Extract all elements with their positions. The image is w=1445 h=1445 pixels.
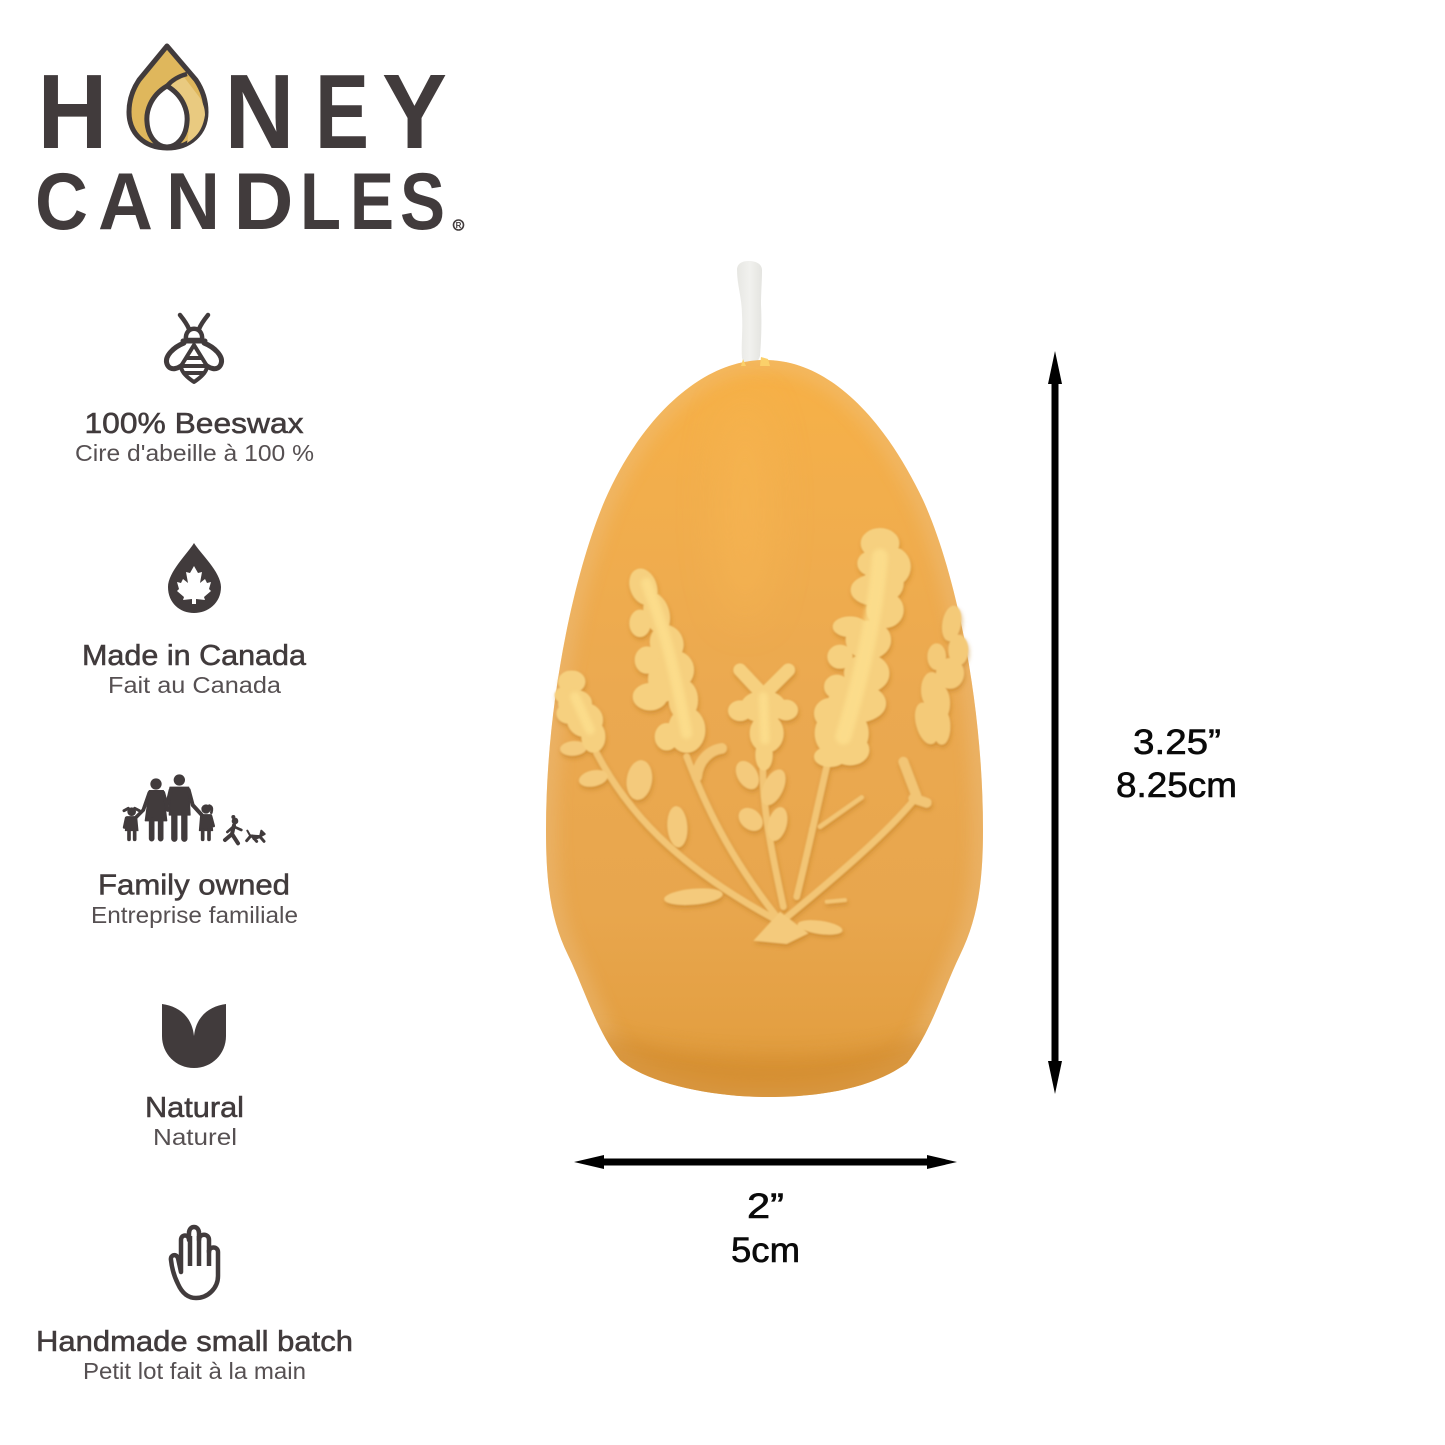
subheading: Entreprise familiale	[91, 902, 298, 928]
heading: 100% Beeswax	[84, 408, 304, 440]
wick base	[741, 357, 770, 366]
feature: 100% Beeswax	[75, 315, 314, 466]
lavender flower heads	[557, 530, 909, 768]
arrow: height	[1048, 351, 1062, 1094]
icon: hand	[171, 1227, 218, 1298]
lavender leaves and base	[560, 740, 843, 944]
logo word: HONEY: N	[224, 53, 294, 171]
logo word: CANDLES: S	[400, 157, 445, 247]
heading: Family owned	[98, 870, 290, 902]
logo icon: flame drop	[129, 46, 206, 148]
height label: 3.25”	[1133, 723, 1221, 762]
logo word: CANDLES: L	[300, 157, 341, 247]
icon: maple leaf drop	[168, 543, 221, 613]
candle wick	[737, 261, 762, 365]
heading: Made in Canada	[82, 640, 307, 672]
candle shading	[546, 360, 983, 1110]
logo word: CANDLES: D	[234, 157, 294, 247]
logo word: CANDLES: N	[166, 157, 220, 247]
height label: 8.25cm	[1116, 766, 1237, 805]
icon: tulip leaves	[162, 1004, 226, 1068]
lavender highlights	[575, 557, 880, 740]
logo word: CANDLES: C	[35, 157, 88, 247]
arrow: width	[574, 1155, 957, 1169]
height label	[1116, 723, 1237, 805]
logo word: CANDLES: A	[98, 157, 153, 247]
subheading: Naturel	[153, 1124, 237, 1150]
logo word: HONEY: Y	[382, 53, 447, 171]
lavender far-right flower head	[912, 606, 967, 745]
width label	[731, 1187, 800, 1270]
lavender stems	[597, 748, 927, 920]
logo word: HONEY: H	[38, 53, 108, 171]
logo word: HONEY	[38, 46, 447, 171]
feature: Handmade small batch	[36, 1227, 353, 1384]
subheading: Petit lot fait à la main	[83, 1358, 306, 1384]
logo word: CANDLES	[35, 157, 445, 247]
candle body	[546, 360, 983, 1097]
logo registered mark: R	[456, 221, 462, 230]
subheading: Cire d'abeille à 100 %	[75, 440, 314, 466]
width label: 5cm	[731, 1231, 800, 1270]
candle: beeswax egg	[546, 261, 983, 1110]
feature: Natural	[145, 1004, 244, 1150]
logo: Honey Candles	[35, 46, 464, 247]
logo registered mark	[454, 220, 464, 230]
logo word: CANDLES: E	[350, 157, 394, 247]
feature: Family owned	[91, 774, 298, 928]
icon: family silhouettes	[124, 774, 265, 843]
icon: bee	[166, 315, 222, 382]
heading: Natural	[145, 1092, 244, 1124]
lavender relief	[557, 530, 967, 944]
feature: Made in Canada	[82, 543, 307, 698]
width label: 2”	[747, 1187, 784, 1226]
subheading: Fait au Canada	[108, 672, 282, 698]
heading: Handmade small batch	[36, 1326, 353, 1358]
logo word: HONEY: E	[315, 53, 369, 171]
